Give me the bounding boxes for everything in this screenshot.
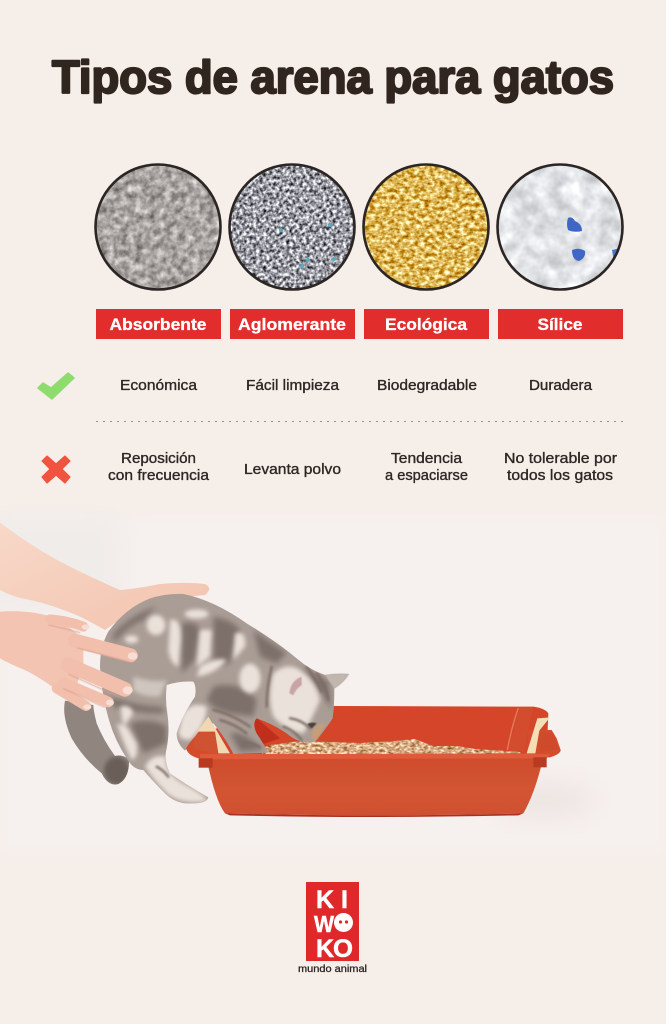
advantages row: Duradera bbox=[529, 378, 593, 394]
label: Sílice: Sílice bbox=[538, 316, 582, 334]
photo: clumping litter bbox=[230, 164, 354, 290]
advantages row bbox=[120, 378, 593, 394]
disadvantages row: todos los gatos bbox=[507, 468, 613, 484]
label: Aglomerante: Aglomerante bbox=[238, 316, 346, 334]
disadvantages row: Levanta polvo bbox=[244, 462, 341, 478]
ear and eye bbox=[289, 677, 302, 695]
label: Sílice bbox=[498, 309, 623, 339]
dark tabby markings bbox=[110, 607, 332, 753]
advantages row: Económica bbox=[120, 378, 198, 394]
logo: Kiwoko bbox=[298, 882, 367, 975]
title: Tipos de arena para gatos bbox=[52, 51, 614, 103]
label: Absorbente: Absorbente bbox=[110, 316, 206, 334]
disadvantages row: a espaciarse bbox=[385, 468, 468, 484]
cat tail bbox=[64, 701, 129, 785]
litter box back wall bbox=[197, 706, 548, 755]
advantages row: Fácil limpieza bbox=[246, 378, 340, 394]
fingers bbox=[50, 619, 131, 706]
label: Ecológica: Ecológica bbox=[385, 316, 468, 334]
light tabby markings bbox=[117, 609, 320, 802]
label: Absorbente bbox=[96, 309, 221, 339]
fine stripes on the face and legs bbox=[157, 667, 328, 777]
litter box front bbox=[186, 717, 561, 817]
logo: Kiwoko: W bbox=[314, 911, 334, 937]
advantages row: Biodegradable bbox=[377, 378, 477, 394]
disadvantages row: Reposición bbox=[121, 451, 196, 467]
icon: red cross bbox=[42, 456, 70, 483]
photo: ecological litter bbox=[364, 164, 488, 290]
icon: green check bbox=[38, 373, 74, 399]
logo: Kiwoko: O bbox=[333, 935, 353, 963]
upper arm and hand bbox=[0, 523, 209, 630]
disadvantages row bbox=[108, 451, 617, 484]
photo: cat using litter box bbox=[0, 522, 561, 817]
photo: absorbent litter bbox=[96, 164, 220, 290]
logo: Kiwoko: K bbox=[316, 886, 334, 914]
disadvantages row: con frecuencia bbox=[108, 468, 210, 484]
litter pellets bbox=[262, 739, 521, 754]
label: Ecológica bbox=[364, 309, 489, 339]
cat body bbox=[100, 594, 349, 804]
logo: Kiwoko: mundo animal bbox=[298, 963, 367, 975]
cream handles bbox=[197, 717, 230, 753]
label: Aglomerante bbox=[230, 309, 355, 339]
lower hand bbox=[0, 611, 138, 710]
disadvantages row: No tolerable por bbox=[504, 451, 617, 467]
photo: silica litter bbox=[498, 164, 622, 290]
logo: Kiwoko: I bbox=[341, 886, 348, 914]
disadvantages row: Tendencia bbox=[391, 451, 463, 467]
logo: Kiwoko: K bbox=[316, 935, 334, 963]
